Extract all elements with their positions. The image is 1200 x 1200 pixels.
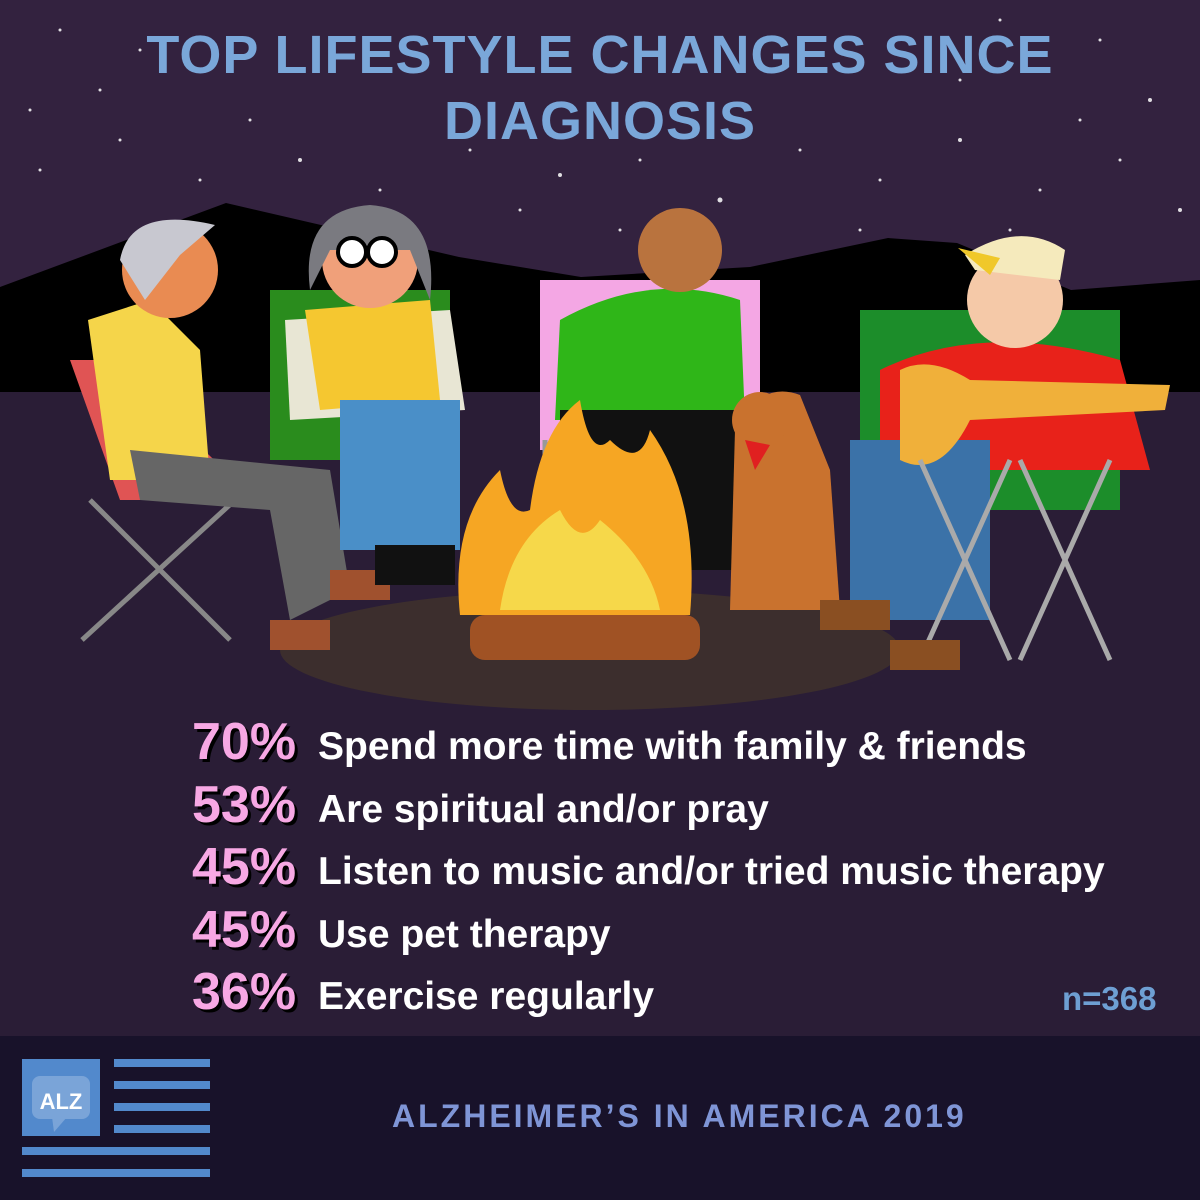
stat 36%: Exercise regularly	[318, 975, 654, 1018]
title	[146, 25, 1054, 151]
stat 45% pet: 45%	[192, 900, 296, 958]
stat 45% pet: Use pet therapy	[318, 912, 611, 956]
footer title: ALZHEIMER’S IN AMERICA 2019	[392, 1098, 967, 1134]
stat 53%	[192, 776, 769, 834]
stats list	[192, 713, 1105, 1021]
stat 70%: 70%	[192, 713, 296, 771]
dog	[730, 392, 840, 610]
sample size: n=368	[1062, 980, 1156, 1017]
person 2	[270, 205, 465, 585]
stat 36%: 36%	[192, 963, 296, 1021]
stat 45% music: Listen to music and/or tried music therapy	[318, 850, 1105, 893]
stat 45% pet	[192, 900, 611, 958]
logo	[22, 1059, 210, 1177]
stat 70%	[192, 713, 1027, 771]
title: DIAGNOSIS	[444, 91, 756, 151]
campfire	[458, 400, 700, 660]
stat 53%: 53%	[192, 776, 296, 834]
stat 45% music: 45%	[192, 838, 296, 896]
person 1	[70, 220, 390, 650]
footer	[0, 1036, 1200, 1200]
title: TOP LIFESTYLE CHANGES SINCE	[146, 25, 1054, 85]
person 3	[540, 208, 760, 570]
stat 45% music	[192, 838, 1105, 896]
stat 53%: Are spiritual and/or pray	[318, 788, 769, 830]
stat 70%: Spend more time with family & friends	[318, 725, 1027, 768]
mountains	[0, 203, 1200, 392]
logo: ALZ	[40, 1089, 82, 1114]
firelight ground	[280, 590, 900, 710]
person 4	[820, 236, 1170, 670]
stat 36%	[192, 963, 654, 1021]
